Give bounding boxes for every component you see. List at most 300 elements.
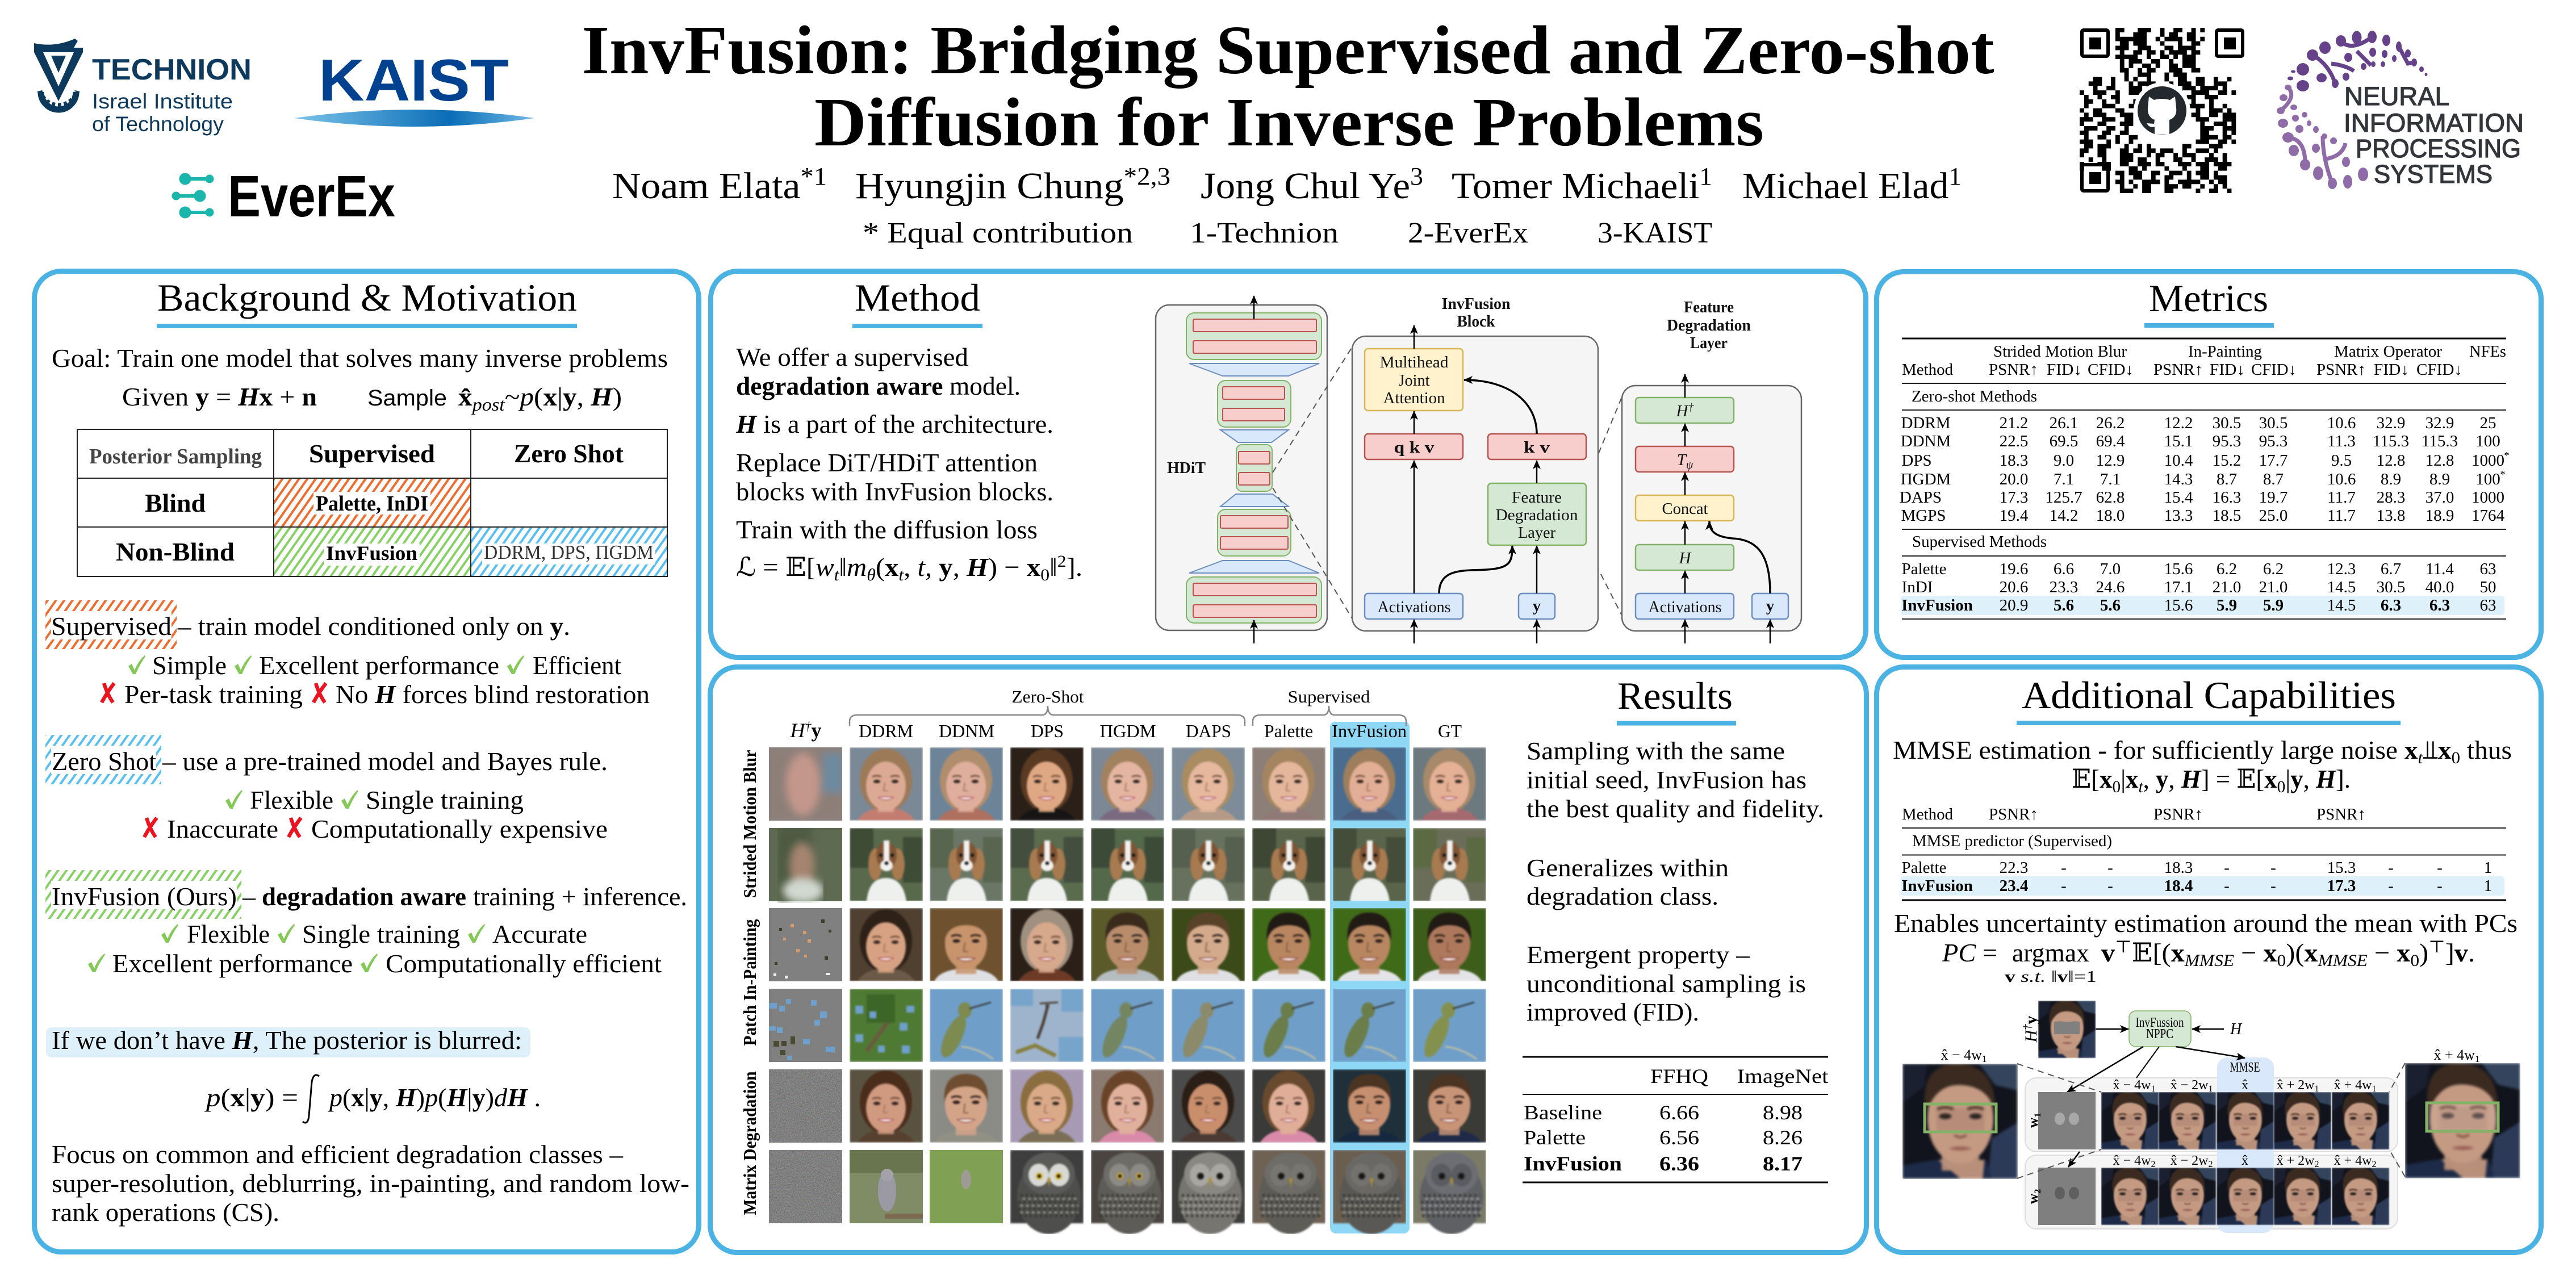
input image: degraded face: [2038, 1001, 2096, 1058]
diagram: HDiT architecture: [1156, 296, 1327, 643]
table: MMSE predictor: 17.3: [2327, 877, 2356, 895]
table: MMSE predictor: -: [2224, 859, 2230, 877]
table: MMSE predictor: 18.4: [2164, 877, 2193, 895]
formula: sample posterior: Sample: [367, 386, 447, 411]
formula: conditional expectation: y, H] = 𝔼[x: [2156, 764, 2277, 793]
results text: Generalizes within: [1527, 854, 1729, 882]
table: metrics: PSNR↑: [2316, 361, 2366, 379]
table: metrics: 11.7: [2327, 507, 2356, 525]
table: MMSE predictor: -: [2270, 877, 2276, 895]
diagram: NPPC uncertainty: y: [2022, 1016, 2040, 1024]
table: MMSE predictor: -: [2107, 877, 2113, 895]
table: posterior sampling taxonomy: [77, 429, 667, 576]
affiliations: 3-KAIST: [1598, 217, 1712, 249]
row: face motion blur: [769, 747, 1486, 821]
table: MMSE predictor: -: [2437, 859, 2443, 877]
logo: EverEx: [172, 164, 395, 229]
authors: Jong Chul Ye: [1201, 165, 1402, 207]
logo: Technion: of Technology: [92, 112, 224, 136]
table: metrics: 63: [2479, 560, 2496, 578]
diagram: InvFusion block: Degradation: [1496, 506, 1578, 524]
formula: principal components: 0: [2410, 951, 2419, 970]
method text: Replace DiT/HDiT attention: [736, 448, 1038, 477]
formula: principal components: 𝔼[(: [2132, 938, 2171, 967]
table: MMSE predictor: -: [2061, 859, 2067, 877]
goal text: Goal: Train one model that solves many inverse problems: [52, 344, 668, 373]
column headers: [789, 719, 1462, 742]
table: metrics: [1900, 338, 2509, 619]
row: face in-painting: [769, 908, 1486, 981]
table: metrics: 11.7: [2327, 488, 2356, 507]
column headers: H: [791, 719, 805, 742]
text: MMSE estimation: x: [2438, 735, 2452, 764]
table: metrics: 10.6: [2327, 414, 2356, 432]
formula: diffusion loss: x: [885, 553, 898, 582]
column headers: GT: [1438, 721, 1462, 741]
text: MMSE estimation: t: [2418, 748, 2423, 767]
text: MMSE estimation: ⫫: [2423, 735, 2438, 764]
closing text: super-resolution, deblurring, in-painting, and random low-: [52, 1169, 689, 1198]
table: unconditional FID: 6.56: [1659, 1126, 1699, 1149]
table: metrics: NFEs: [2469, 342, 2506, 361]
table: metrics: 19.6: [2000, 560, 2028, 578]
table: metrics: InvFusion: [1901, 596, 1973, 614]
closing text: [52, 1140, 689, 1227]
table: MMSE predictor: -: [2388, 877, 2394, 895]
table: metrics: DDNM: [1901, 432, 1951, 450]
table: metrics: 15.6: [2164, 560, 2193, 578]
table: metrics: MGPS: [1901, 507, 1946, 525]
image strip: component 2: 2: [2151, 1160, 2155, 1169]
diagram: InvFusion block: q k v: [1394, 438, 1435, 457]
block: supervised: No H forces blind restoration: [336, 680, 650, 709]
table: MMSE predictor: -: [2107, 859, 2113, 877]
results text: the best quality and fidelity.: [1527, 795, 1824, 823]
method text: blocks with InvFusion blocks.: [736, 477, 1053, 506]
table: unconditional FID: ImageNet: [1737, 1065, 1829, 1088]
formula: conditional expectation: |: [2285, 764, 2290, 793]
table: metrics: 19.7: [2259, 488, 2288, 507]
table: metrics: 21.0: [2213, 578, 2241, 596]
diagram: NPPC uncertainty: H: [2022, 1030, 2040, 1042]
column headers: DDRM: [859, 721, 913, 741]
authors: Michael Elad: [1742, 165, 1943, 207]
table: metrics: PSNR↑: [1989, 361, 2038, 379]
image grid: restoration results: [769, 747, 1486, 1234]
block: invfusion: Computationally efficient: [386, 949, 662, 978]
diagram: InvFusion block: k v: [1524, 438, 1550, 457]
closing text: Focus on common and efficient degradation classes –: [52, 1140, 624, 1169]
row: dog motion blur: [769, 828, 1486, 903]
image strip: component 1: 1: [2314, 1084, 2319, 1094]
table: MMSE predictor: InvFusion: [1901, 877, 1973, 895]
table: metrics: 25.0: [2259, 507, 2288, 525]
table: MMSE predictor: -: [2224, 877, 2230, 895]
table: metrics: 14.5: [2327, 596, 2356, 614]
formula: diffusion loss: θ: [867, 566, 876, 584]
table: metrics: Supervised Methods: [1912, 533, 2047, 551]
table: metrics: 1000: [2472, 488, 2504, 507]
table: metrics: 115.3: [2373, 432, 2409, 450]
QR code: [2080, 30, 2243, 191]
table: metrics: 18.9: [2426, 507, 2454, 525]
method text: degradation aware model.: [736, 371, 1021, 400]
table: metrics: 15.6: [2164, 596, 2193, 614]
block: supervised: Supervised: [51, 612, 172, 641]
diagram: feature degradation layer: H: [1679, 549, 1692, 567]
table: metrics: 15.1: [2164, 432, 2193, 450]
table: metrics: 37.0: [2426, 488, 2454, 507]
method text: H is a part of the architecture.: [735, 409, 1053, 438]
block: supervised: Per-task training: [124, 680, 303, 709]
authors: 1: [1699, 162, 1712, 190]
results text: degradation class.: [1527, 883, 1718, 910]
table: metrics: CFID↓: [2251, 361, 2297, 379]
block: invfusion: degradation aware: [262, 882, 466, 911]
table: posterior sampling taxonomy: Palette, InDI: [316, 492, 428, 516]
table: MMSE predictor: 22.3: [2000, 859, 2028, 877]
table: unconditional FID: Palette: [1524, 1126, 1586, 1149]
formula: principal components: ⊤: [2428, 938, 2445, 956]
table: metrics: 23.3: [2050, 578, 2078, 596]
formula: diffusion loss: 0: [1040, 566, 1049, 584]
authors: *1: [800, 162, 827, 190]
table: metrics: 6.6: [2054, 560, 2074, 578]
text: MMSE estimation: 0: [2452, 748, 2460, 767]
text: MMSE estimation: thus: [2460, 735, 2512, 764]
authors: 1: [1948, 162, 1962, 190]
table: metrics: 30.5: [2213, 414, 2241, 432]
column headers: ΠGDM: [1099, 721, 1156, 741]
table: metrics: 12.9: [2096, 451, 2125, 470]
table: metrics: ΠGDM: [1901, 470, 1951, 488]
group labels: method families: [850, 687, 1406, 726]
logo: KAIST: KAIST: [319, 48, 509, 114]
table: metrics: 5.6: [2100, 596, 2121, 614]
image strip: component 1: x̂ + 2w: [2277, 1078, 2314, 1093]
formula: principal components: argmax: [2012, 938, 2089, 967]
table: metrics: 21.2: [2000, 414, 2028, 432]
table: unconditional FID: 8.98: [1763, 1101, 1803, 1124]
table: metrics: 50: [2479, 578, 2496, 596]
zoomed image: plus direction: 1: [2475, 1053, 2479, 1064]
block: invfusion: Single training: [302, 919, 460, 948]
table: metrics: DAPS: [1900, 488, 1942, 507]
column headers: DDNM: [939, 721, 994, 741]
table: MMSE predictor: 15.3: [2327, 859, 2356, 877]
block: supervised: Simple: [152, 651, 227, 680]
formula: conditional expectation: t: [2138, 777, 2143, 796]
formula: diffusion loss: ‖: [1049, 553, 1057, 582]
column headers: DPS: [1031, 721, 1064, 741]
table: metrics: 17.1: [2164, 578, 2193, 596]
table: MMSE predictor: 23.4: [2000, 877, 2028, 895]
table: metrics: 11.4: [2426, 560, 2454, 578]
table: metrics: 20.0: [2000, 470, 2028, 488]
formula: diffusion loss: t: [834, 566, 839, 584]
row labels: Patch In-Painting: [739, 919, 760, 1046]
results text: unconditional sampling is: [1527, 970, 1806, 998]
formula: sample posterior: ~: [505, 382, 520, 411]
table: posterior sampling taxonomy: Non-Blind: [116, 537, 235, 566]
table: metrics: 20.9: [2000, 596, 2028, 614]
table: metrics: Method: [1902, 361, 1953, 379]
table: MMSE predictor: -: [2437, 877, 2443, 895]
image strip: component 1: x̂ + 4w: [2334, 1078, 2372, 1093]
table: metrics: 5.6: [2054, 596, 2074, 614]
table: posterior sampling taxonomy: Posterior Sampling: [89, 445, 262, 469]
column headers: DAPS: [1186, 721, 1231, 741]
diagram: feature degradation layer: Activations: [1648, 598, 1722, 616]
diagram: InvFusion block: Layer: [1518, 524, 1555, 542]
table: metrics: 62.8: [2096, 488, 2125, 507]
table: unconditional FID: 6.66: [1659, 1101, 1699, 1124]
table: MMSE predictor: 18.3: [2164, 859, 2193, 877]
block: invfusion: InvFusion (Ours): [52, 882, 237, 911]
formula: sample posterior: [367, 382, 622, 415]
heading: additional capabilities: Additional Capabilities: [2022, 674, 2396, 717]
diagram: NPPC uncertainty: MMSE: [2230, 1060, 2260, 1075]
table: metrics: 11.3: [2327, 432, 2356, 450]
block: invfusion: [45, 870, 687, 978]
image strip: component 2: 2: [2372, 1160, 2376, 1169]
formula: principal components: v: [2101, 938, 2115, 967]
diagram: feature degradation layer: [1622, 298, 1801, 643]
group labels: method families: Supervised: [1288, 687, 1370, 706]
image strip: component 1: w: [2025, 1118, 2041, 1128]
image strip: component 2: x̂ − 2w: [2171, 1153, 2208, 1168]
title: InvFusion: Bridging Supervised and Zero-shot: [582, 12, 1994, 89]
diagram: dashed zoom connectors: [1273, 347, 1622, 618]
table: metrics: 100: [2475, 470, 2500, 488]
affiliations: * Equal contribution: [863, 217, 1133, 249]
formula: diffusion loss: ].: [1067, 553, 1082, 582]
table: posterior sampling taxonomy: Supervised: [309, 439, 435, 468]
table: MMSE predictor: PSNR↑: [2316, 805, 2366, 823]
table: metrics: 15.2: [2213, 451, 2241, 470]
logo: Technion: TECHNION: [92, 53, 252, 86]
logo: NeurIPS: SYSTEMS: [2374, 160, 2493, 189]
formula: principal components: x: [2171, 938, 2185, 967]
table: metrics: Strided Motion Blur: [1993, 342, 2127, 361]
table: metrics: 19.4: [2000, 507, 2029, 525]
table: metrics: 6.3: [2429, 596, 2450, 614]
block: invfusion: Excellent performance: [112, 949, 353, 978]
affiliations: 2-EverEx: [1408, 217, 1528, 249]
diagram: NPPC uncertainty: [1902, 1001, 2520, 1233]
table: MMSE predictor: MMSE predictor (Supervised): [1912, 832, 2112, 850]
zoomed image: minus direction: x̂ − 4w: [1941, 1047, 1982, 1063]
table: posterior sampling taxonomy: DDRM, DPS, ΠGDM: [484, 541, 654, 563]
title: Diffusion for Inverse Problems: [814, 84, 1764, 161]
table: metrics: 15.4: [2164, 488, 2193, 507]
diagram: InvFusion block: Attention: [1383, 389, 1445, 407]
formula: diffusion loss: ,: [904, 553, 918, 582]
formula: forward model: Given y = Hx + n: [122, 382, 317, 411]
authors: [612, 162, 1962, 207]
diagram: feature degradation layer: Degradation: [1667, 316, 1751, 334]
table: metrics: 10.6: [2327, 470, 2356, 488]
table: unconditional FID: 6.36: [1659, 1152, 1699, 1175]
row: owl matrix degradation: [769, 1150, 1486, 1234]
row: face matrix degradation: [769, 1069, 1486, 1143]
formula: marginal posterior: p(x|y, H)p(H|y)dH .: [328, 1083, 541, 1112]
image strip: component 1: x̂ − 2w: [2171, 1078, 2208, 1093]
table: metrics: 16.3: [2213, 488, 2241, 507]
diagram: InvFusion block: [1352, 295, 1598, 643]
diagram: InvFusion block: Feature: [1512, 488, 1562, 507]
panel: results: [710, 667, 1866, 1253]
row labels: Strided Motion Blur: [739, 750, 760, 898]
table: metrics: 12.8: [2426, 451, 2454, 470]
block: invfusion: Accurate: [492, 919, 587, 948]
table: metrics: 30.5: [2377, 578, 2405, 596]
table: metrics: 32.9: [2426, 414, 2454, 432]
table: metrics: 12.8: [2377, 451, 2405, 470]
table: metrics: 28.3: [2377, 488, 2405, 507]
image strip: component 1: 1: [2372, 1084, 2376, 1094]
table: metrics: 5.9: [2217, 596, 2237, 614]
table: MMSE predictor: -: [2270, 859, 2276, 877]
table: MMSE predictor: PSNR↑: [1989, 805, 2038, 823]
table: metrics: 9.5: [2331, 451, 2352, 470]
column headers: y: [811, 719, 821, 742]
table: metrics: 6.2: [2263, 560, 2284, 578]
table: metrics: *: [2504, 450, 2509, 461]
diagram: feature degradation layer: †: [1688, 401, 1694, 413]
zoomed image: minus direction: [1902, 1047, 2018, 1179]
block: supervised: [45, 600, 650, 709]
table: metrics: Zero-shot Methods: [1912, 387, 2037, 405]
group labels: method families: Zero-Shot: [1012, 687, 1084, 706]
row labels: Matrix Degradation: [739, 1071, 760, 1215]
formula: principal components: −: [2368, 938, 2397, 967]
formula: diffusion loss: m: [847, 553, 867, 582]
formula: conditional expectation: |: [2121, 764, 2126, 793]
row labels: [739, 750, 760, 1215]
table: metrics: 7.0: [2100, 560, 2121, 578]
table: unconditional FID: [1523, 1057, 1829, 1182]
formula: diffusion loss: t, y, H) − x: [918, 553, 1040, 582]
block: zero shot: Computationally expensive: [311, 814, 608, 843]
table: metrics: 115.3: [2422, 432, 2458, 450]
table: unconditional FID: FFHQ: [1650, 1065, 1708, 1088]
formula: sample posterior: x̂: [458, 382, 472, 411]
table: metrics: 1000: [2472, 451, 2504, 470]
panel: metrics: [1876, 271, 2541, 658]
table: MMSE predictor: -: [2388, 859, 2394, 877]
authors: Noam Elata: [612, 165, 790, 207]
table: metrics: 18.3: [2000, 451, 2028, 470]
diagram: InvFusion block: Activations: [1378, 598, 1450, 616]
table: metrics: 22.5: [2000, 432, 2028, 450]
table: metrics: 25: [2479, 414, 2496, 432]
image strip: component 2: 2: [2208, 1160, 2213, 1169]
table: metrics: 17.3: [2000, 488, 2028, 507]
image strip: component 1: 1: [2151, 1084, 2155, 1094]
logo: EverEx: EverEx: [228, 164, 395, 229]
logo: NeurIPS: INFORMATION: [2344, 108, 2524, 137]
image strip: component 1: 1: [2033, 1113, 2043, 1118]
block: zero shot: – use a pre-trained model and Bayes rule.: [162, 747, 608, 776]
logo: Technion: Israel Institute: [92, 90, 233, 113]
table: MMSE predictor: [1901, 805, 2506, 900]
image strip: component 1: [2025, 1078, 2389, 1149]
row: bird in-painting: [769, 989, 1486, 1062]
table: MMSE predictor: 1: [2484, 859, 2492, 877]
table: metrics: FID↓: [2210, 361, 2245, 379]
image strip: component 1: x̂: [2242, 1078, 2248, 1093]
table: metrics: 12.3: [2327, 560, 2356, 578]
formula: marginal posterior: p(x|y) =: [204, 1083, 298, 1112]
table: metrics: 14.3: [2164, 470, 2193, 488]
diagram: feature degradation layer: H: [1676, 402, 1688, 420]
table: metrics: InDI: [1902, 578, 1933, 596]
callout: blurred posterior: If we don’t have H, The posterior is blurred:: [52, 1026, 522, 1055]
table: metrics: 26.1: [2050, 414, 2078, 432]
table: metrics: 100: [2475, 432, 2500, 450]
diagram: feature degradation layer: ψ: [1686, 459, 1693, 471]
formula: principal components: x: [2263, 938, 2277, 967]
formula: conditional expectation: 𝔼[x: [2072, 764, 2113, 793]
authors: 3: [1410, 162, 1423, 190]
table: posterior sampling taxonomy: Blind: [145, 488, 206, 517]
image strip: component 2: 2: [2033, 1189, 2043, 1194]
table: metrics: 69.4: [2096, 432, 2125, 450]
formula: conditional expectation: 0: [2277, 777, 2285, 796]
block: zero shot: [45, 735, 608, 843]
table: posterior sampling taxonomy: Zero Shot: [514, 439, 624, 468]
formula: diffusion loss: (: [876, 553, 885, 582]
formula: conditional expectation: 0: [2112, 777, 2121, 796]
block: supervised: Excellent performance: [259, 651, 499, 680]
table: metrics: CFID↓: [2416, 361, 2462, 379]
table: metrics: 6.2: [2217, 560, 2237, 578]
highlight column: InvFusion: [1330, 722, 1410, 1233]
table: metrics: 18.5: [2213, 507, 2241, 525]
table: metrics: In-Painting: [2188, 342, 2262, 361]
diagram: InvFusion block: InvFusion: [1441, 295, 1511, 313]
image strip: component 2: x̂ + 2w: [2277, 1153, 2314, 1168]
table: unconditional FID: InvFusion: [1524, 1152, 1622, 1175]
diagram: feature degradation layer: Concat: [1662, 500, 1708, 518]
diagram: NPPC uncertainty: †: [2021, 1024, 2034, 1030]
authors: Hyungjin Chung: [855, 165, 1106, 207]
table: metrics: *: [2500, 469, 2506, 480]
box: InvFussion NPPC: NPPC: [2146, 1027, 2173, 1042]
table: metrics: 24.6: [2096, 578, 2125, 596]
heading: background and motivation: Background & Motivation: [157, 276, 577, 319]
table: metrics: 8.9: [2381, 470, 2401, 488]
table: unconditional FID: 8.26: [1763, 1126, 1803, 1149]
formula: conditional expectation: y, H].: [2290, 764, 2351, 793]
table: metrics: 1764: [2472, 507, 2504, 525]
diagram: NPPC uncertainty: H: [2230, 1021, 2243, 1038]
table: metrics: 9.0: [2054, 451, 2074, 470]
table: metrics: 5.9: [2263, 596, 2284, 614]
formula: principal components: MMSE: [2184, 951, 2234, 970]
logo: KAIST: [294, 48, 534, 127]
text: MMSE estimation: MMSE estimation - for sufficiently large noise x: [1893, 735, 2418, 764]
diagram: feature degradation layer: y: [1766, 597, 1775, 615]
formula: marginal posterior: [204, 1075, 541, 1123]
diagram: feature degradation layer: Feature: [1684, 298, 1734, 316]
formula: diffusion loss: ‖: [839, 553, 847, 582]
method text: Train with the diffusion loss: [736, 515, 1038, 544]
results text: Emergent property –: [1527, 941, 1750, 969]
formula: principal components: x: [2397, 938, 2410, 967]
table: metrics: 69.5: [2050, 432, 2078, 450]
